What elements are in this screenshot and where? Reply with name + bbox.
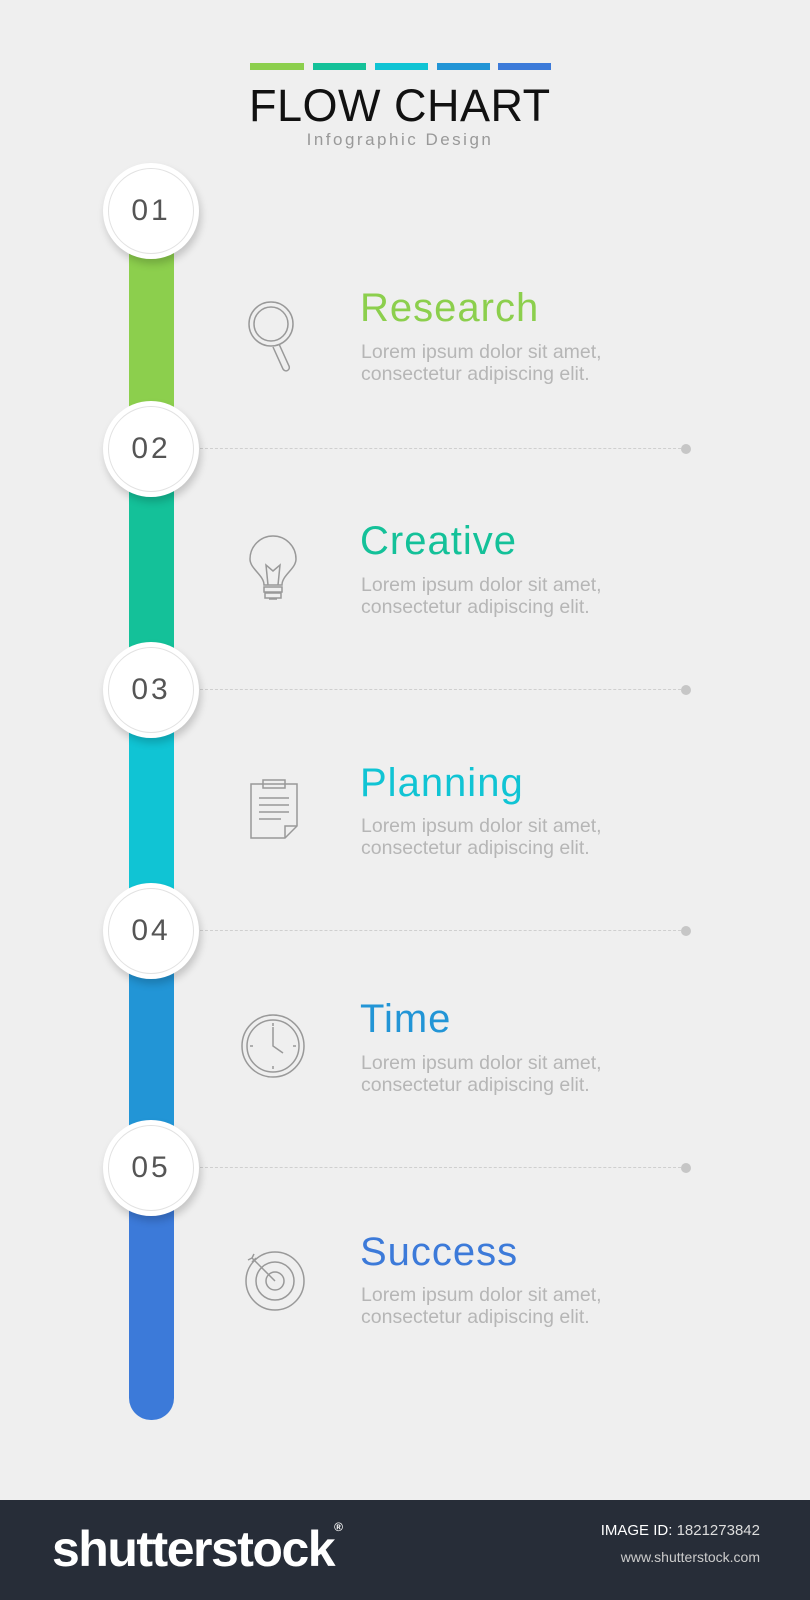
- footer logo: shutterstock®: [52, 1520, 341, 1577]
- heading: Creative: Creative: [360, 519, 517, 563]
- step circle 04: 04: [131, 914, 171, 947]
- timeline bar: [129, 230, 174, 1420]
- step circle 03: 03: [131, 673, 171, 706]
- icon: clock: [241, 1014, 305, 1078]
- text: Creative: Lorem ipsum dolor sit amet,: [361, 574, 602, 596]
- step circle 05: [103, 1120, 199, 1216]
- text: Success: Lorem ipsum dolor sit amet,: [361, 1284, 602, 1306]
- text: Research: [361, 341, 602, 385]
- step circle 01: [103, 163, 199, 259]
- heading: Time: Time: [360, 997, 451, 1041]
- heading: Research: Research: [360, 286, 539, 330]
- title block: [249, 63, 551, 149]
- text: Planning: Lorem ipsum dolor sit amet,: [361, 815, 602, 837]
- step circle 02: 02: [131, 432, 171, 465]
- text: Planning: consectetur adipiscing elit.: [361, 837, 590, 859]
- footer image id: IMAGE ID: 1821273842: [601, 1522, 760, 1539]
- dashed connectors: [200, 444, 691, 1173]
- step circle 02: [103, 401, 199, 497]
- text: Creative: consectetur adipiscing elit.: [361, 596, 590, 618]
- icon: target: [245, 1251, 305, 1311]
- color bars: [250, 63, 551, 70]
- text: Planning: [361, 815, 602, 859]
- heading: FLOW CHART: [249, 80, 551, 131]
- text: Research: consectetur adipiscing elit.: [361, 363, 590, 385]
- footer bar: [0, 1500, 810, 1600]
- step circle 01: 01: [131, 194, 171, 227]
- step circle 03: [103, 642, 199, 738]
- heading: Planning: Planning: [360, 761, 524, 805]
- icon: light bulb: [249, 535, 297, 600]
- subtitle: Infographic Design: [307, 130, 493, 149]
- step circle 04: [103, 883, 199, 979]
- text: Success: consectetur adipiscing elit.: [361, 1306, 590, 1328]
- icon: magnifier: [248, 301, 294, 372]
- text: Time: [361, 1052, 602, 1096]
- text: Time: consectetur adipiscing elit.: [361, 1074, 590, 1096]
- text: Creative: [361, 574, 602, 618]
- footer url: www.shutterstock.com: [621, 1549, 760, 1565]
- step circle 05: 05: [131, 1151, 171, 1184]
- heading: Success: Success: [360, 1230, 518, 1274]
- text: Success: [361, 1284, 602, 1328]
- icon: clipboard: [250, 779, 298, 839]
- text: Research: Lorem ipsum dolor sit amet,: [361, 341, 602, 363]
- text: Time: Lorem ipsum dolor sit amet,: [361, 1052, 602, 1074]
